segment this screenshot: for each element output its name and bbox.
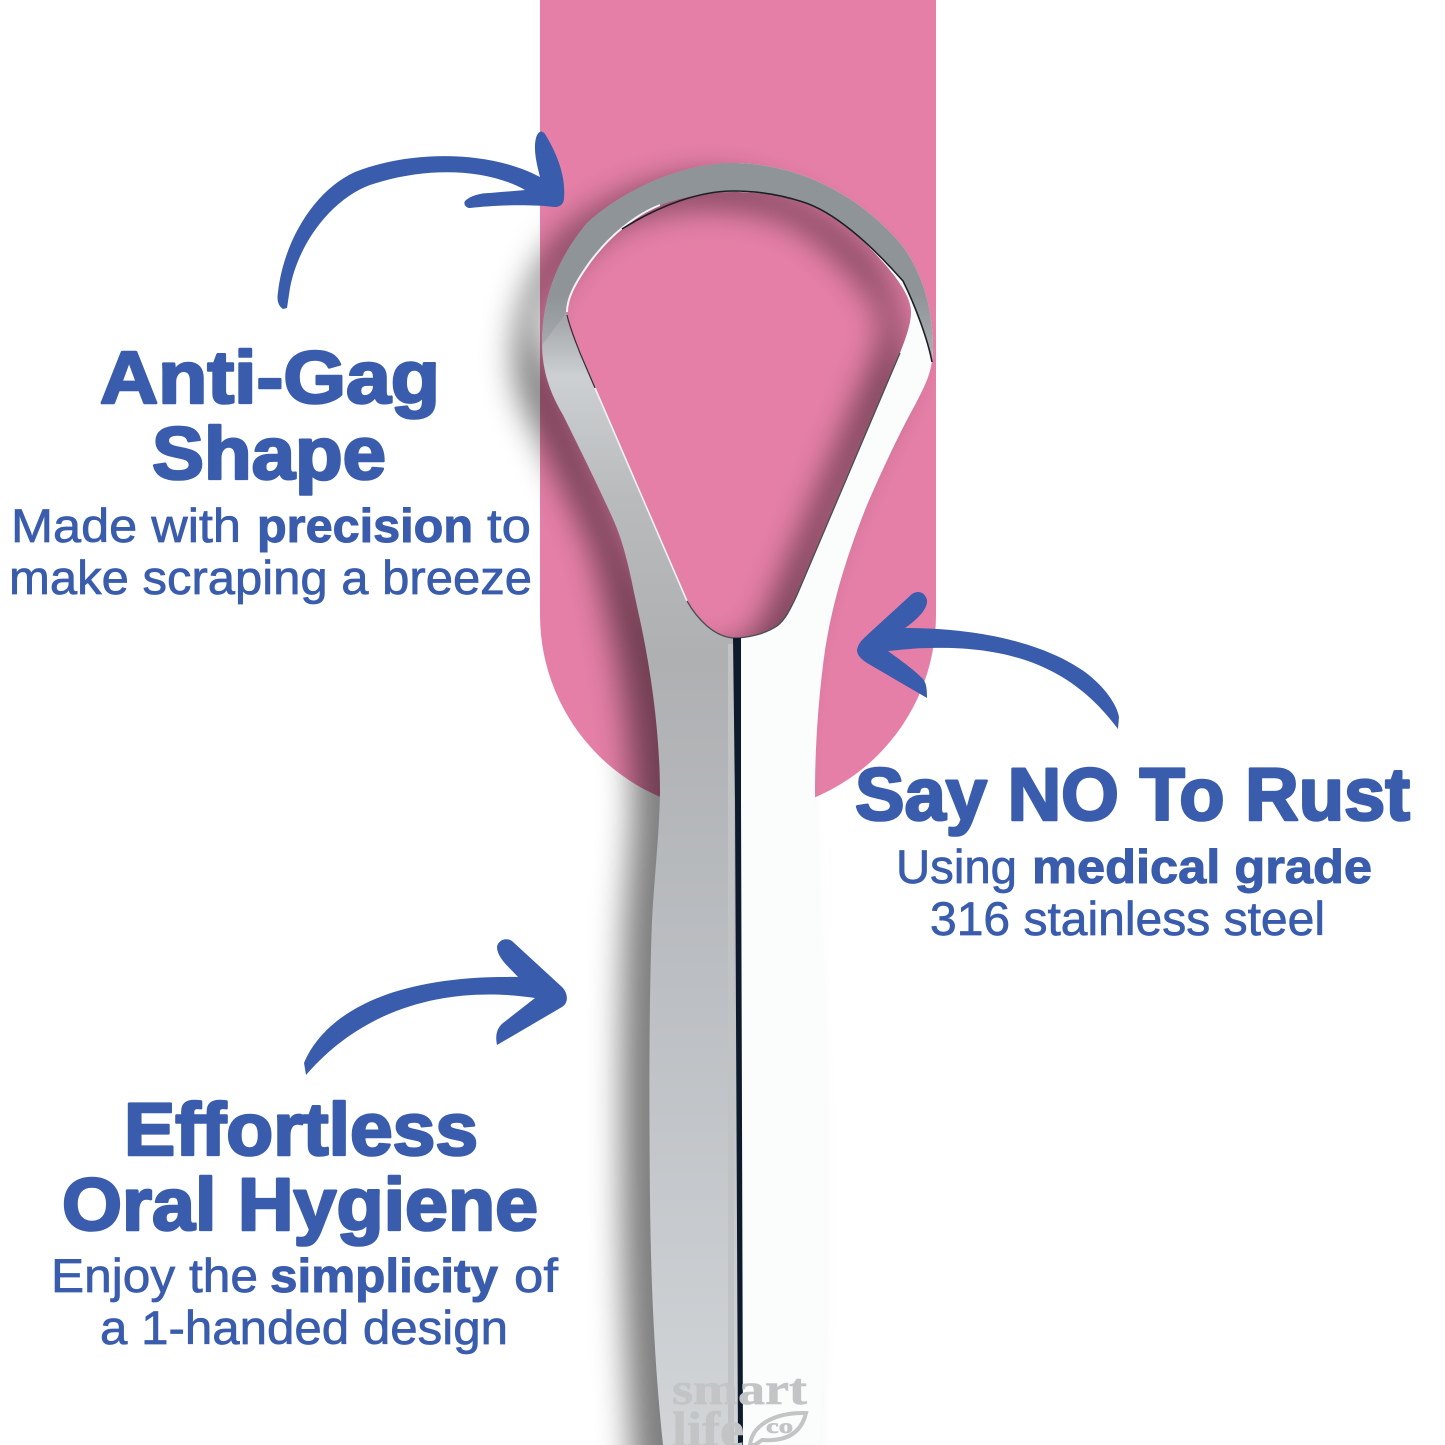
tool left half, silver	[542, 163, 738, 1445]
callout: anti-gag shape	[9, 336, 532, 604]
tongue scraper tool	[514, 163, 933, 1445]
heading: Effortless Oral Hygiene: Oral Hygiene	[62, 1163, 538, 1246]
heading: Anti-Gag Shape: Anti-Gag	[100, 336, 440, 419]
body text: Made with	[11, 499, 241, 552]
body text	[9, 499, 532, 604]
heading: Say NO To Rust: Say NO To Rust	[855, 753, 1410, 836]
heading: Effortless Oral Hygiene	[62, 1088, 538, 1246]
heading: Effortless Oral Hygiene: Effortless	[124, 1088, 478, 1171]
arrow: to rust-resistant steel	[857, 592, 1119, 729]
body text: make scraping a breeze	[9, 551, 532, 604]
body text: 316 stainless steel	[930, 892, 1325, 945]
body text: medical grade	[1032, 840, 1372, 893]
logo leaf	[750, 1413, 806, 1445]
callout: effortless oral hygiene	[51, 1088, 559, 1354]
heading: Anti-Gag Shape: Shape	[152, 412, 386, 495]
body text: to	[487, 499, 531, 552]
body text: a 1-handed design	[100, 1301, 508, 1354]
heading: Anti-Gag Shape	[100, 336, 440, 495]
body text: Enjoy the	[51, 1249, 258, 1302]
body text: simplicity	[270, 1249, 498, 1302]
callout: say no to rust	[855, 753, 1410, 945]
lighter strip beside center groove	[728, 644, 734, 1445]
gray top rim	[542, 163, 933, 362]
hole highlight edges	[567, 205, 660, 312]
logo word: co: co	[766, 1414, 793, 1438]
body text: precision	[257, 499, 473, 552]
body text: of	[514, 1249, 559, 1302]
pink background panel	[540, 0, 936, 813]
logo word: smart: smart	[672, 1365, 807, 1414]
watermark logo: smart life co	[672, 1365, 807, 1445]
tool right half, polished white	[738, 163, 933, 1445]
arrow: to anti-gag head	[278, 132, 564, 309]
tool drop shadow	[514, 177, 905, 1445]
body text	[896, 840, 1372, 945]
body text: Using	[896, 840, 1017, 893]
body text	[51, 1249, 559, 1354]
arrow: to handle	[304, 939, 567, 1075]
dark center groove	[733, 638, 743, 1445]
